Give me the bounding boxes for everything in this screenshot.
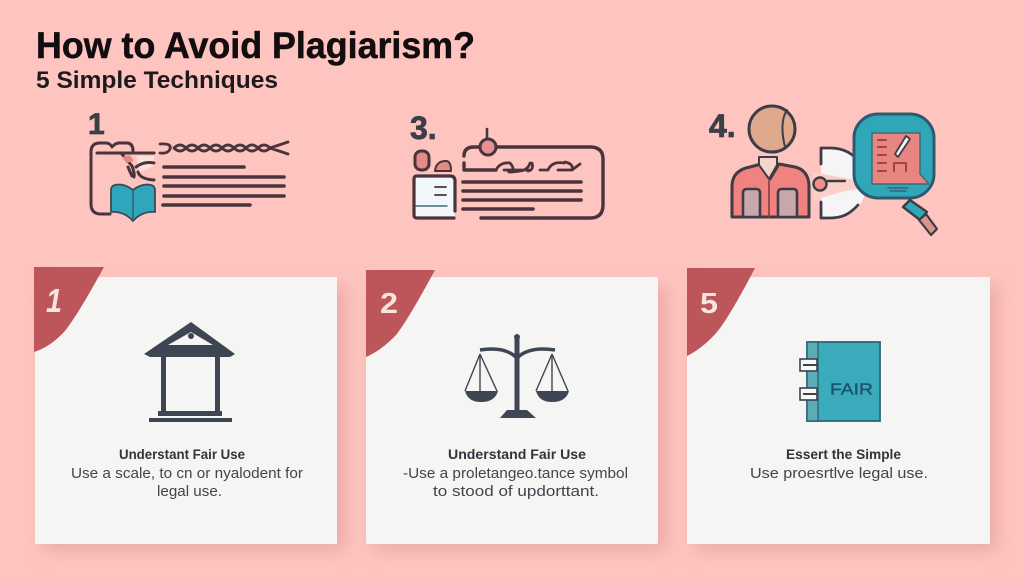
pen [895,136,910,157]
line 1: Use a scale, to cn or nyalodent for [71,466,303,482]
jacket [732,164,809,217]
card body text [71,466,303,500]
binder spine [807,342,818,421]
caption lines [888,188,908,191]
right pocket [778,189,797,217]
half disc outline [821,148,861,218]
lower clip slot [803,393,817,395]
corner ribbon [366,270,435,357]
line 2: legal use. [157,484,222,500]
report chart mark [894,163,906,171]
text lines [163,167,284,205]
clip tab [435,161,451,171]
corner ribbon [34,267,104,352]
connector line [828,180,845,182]
temple roof [144,322,235,357]
hair highlight [782,110,787,147]
frame outline [464,147,603,218]
line 1: -Use a proletangeo.tance symbol [403,466,628,482]
note lines [435,187,446,195]
title: How to Avoid Plagiarism? [36,25,475,66]
icon: temple [144,322,235,422]
icon: scales of justice [465,334,569,418]
magnifier lens [854,114,934,198]
white half disc [821,148,866,218]
book spine [132,191,134,220]
temple ground line [149,418,232,422]
temple base [158,411,222,416]
card body text: Use proesrtlve legal use. [750,466,928,482]
icon group 3: document card [410,110,603,218]
card body [687,277,990,544]
heading chain squiggle [160,142,288,154]
number 3: 3. [410,110,437,146]
report lines [878,140,886,171]
bookmark strokes [121,153,154,180]
central post [514,338,520,410]
panel: understand fair use, card 1 [34,267,346,551]
binder cover [807,342,880,421]
ribbon number: 1 [46,282,62,319]
right pan strings [536,354,568,391]
page top rule [97,152,154,154]
left pocket [743,189,760,217]
left pan strings [465,354,497,391]
left column [161,356,166,412]
line 2: to stood of updorttant. [433,484,599,500]
card heading: Essert the Simple [786,446,901,462]
note sheet [414,176,455,218]
beam [480,349,555,358]
card body [35,277,337,544]
panel: essert the simple, card 3 [687,268,998,551]
jacket centre seam [768,179,770,217]
number 1: 1 [88,108,105,141]
pink band [813,172,866,200]
binder label: FAIR [830,382,873,398]
open book [111,185,155,221]
heading squiggle [496,162,580,172]
icon group 4: person and magnifier [709,106,937,235]
card heading: Understand Fair Use [448,446,586,462]
panel: understand fair use, card 2 [366,270,667,551]
magnifier handle [919,214,937,235]
icon group 1: book and text lines [88,108,288,221]
number 4: 4. [709,108,736,144]
right pan [536,391,569,402]
upper clip slot [803,364,817,366]
card shadow [694,285,998,551]
bookmark tag [122,155,134,163]
card heading: Understant Fair Use [119,447,245,462]
card body [366,277,658,544]
base [500,410,536,418]
subtitle: 5 Simple Techniques [36,67,278,94]
corner ribbon [687,268,755,356]
ribbon number: 2 [380,288,398,320]
card shadow [42,285,346,551]
upper clip [800,359,817,371]
card body text [403,466,628,500]
magnifier collar [903,200,927,220]
left pan [465,391,498,402]
pencil cup [415,151,429,170]
icon: FAIR binder [800,342,880,421]
report sheet [872,133,929,184]
temple pendant [188,333,194,339]
right column [215,356,220,412]
ribbon number: 5 [700,288,718,320]
collar [759,157,777,179]
lower clip [800,388,817,400]
text lines [463,182,581,209]
head [749,106,795,152]
connector node [814,178,826,190]
pin [486,129,488,139]
card shadow [373,285,667,551]
pin head [480,139,496,155]
page shade [136,156,154,172]
post finial [514,334,520,340]
page outline [91,143,133,214]
note rule [416,205,447,207]
